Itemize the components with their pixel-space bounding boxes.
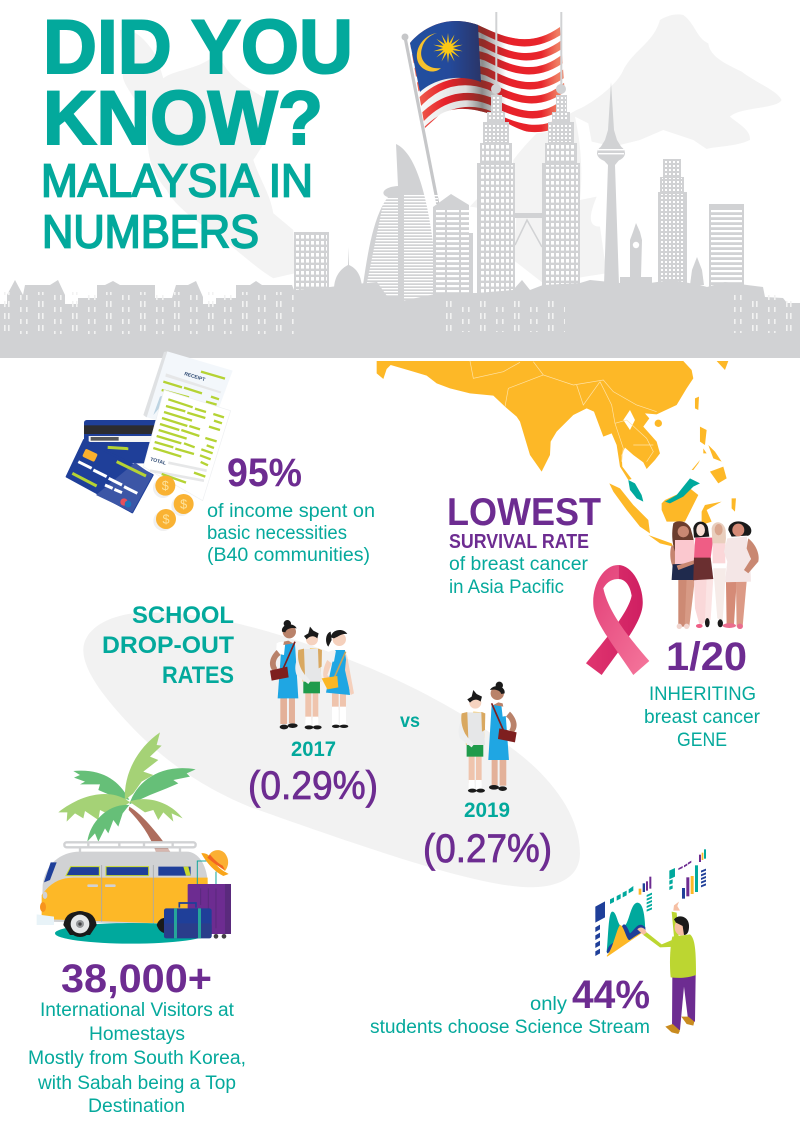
- Malaysia highlighted: [628, 478, 700, 503]
- students 2017: [270, 620, 354, 729]
- school drop-out heading: [102, 602, 234, 689]
- lowest survival rate text: SURVIVAL RATE: [449, 531, 589, 553]
- map of Asia: [377, 361, 736, 547]
- 95% statistic: [207, 451, 375, 566]
- ground shadow: [55, 923, 208, 944]
- 95% statistic: of income spent on: [207, 501, 375, 522]
- school drop-out heading: DROP-OUT: [102, 632, 234, 659]
- background ghost map of Borneo: [470, 14, 782, 283]
- front receipt: TOTAL: [149, 457, 167, 467]
- wheels: [63, 911, 167, 937]
- front credit card: [67, 440, 153, 512]
- title block: KNOW?: [43, 76, 323, 161]
- vs label: vs: [400, 711, 420, 732]
- skybridge: [515, 213, 543, 247]
- 2019 figure: [423, 799, 552, 871]
- card and receipts illustration: [67, 351, 233, 531]
- 1/20 statistic: [644, 635, 761, 751]
- 38,000+ statistic: Homestays: [89, 1024, 185, 1045]
- luggage: [164, 861, 231, 939]
- title block: NUMBERS: [42, 206, 259, 258]
- lowest survival rate text: LOWEST: [447, 491, 601, 534]
- mainland asia and India: [377, 361, 693, 480]
- block beside sail: [433, 194, 473, 300]
- 44% statistic: 44%: [572, 973, 650, 1017]
- Laos highlight and borders: [470, 361, 657, 462]
- campervan with palm tree: [37, 732, 231, 944]
- 38,000+ statistic: 38,000+: [61, 957, 212, 1001]
- 38,000+ statistic: [28, 957, 246, 1117]
- right chart: [669, 849, 706, 899]
- title block: [41, 5, 353, 258]
- 1/20 statistic: GENE: [677, 730, 727, 751]
- 95% statistic: (B40 communities): [207, 545, 370, 566]
- coins: [153, 476, 194, 531]
- background ghost map of Peninsular Malaysia: [120, 29, 295, 278]
- 38,000+ statistic: with Sabah being a Top: [37, 1073, 236, 1094]
- pink ribbon: [586, 565, 649, 675]
- woman 3: [712, 522, 726, 627]
- 44% statistic: students choose Science Stream: [370, 1017, 650, 1038]
- sail tower: [363, 144, 438, 303]
- 95% statistic: basic necessities: [207, 523, 347, 544]
- southeast asian islands: [609, 361, 736, 547]
- coins: $: [162, 513, 170, 527]
- students 2019: [459, 682, 517, 793]
- van body: [37, 852, 208, 925]
- skyline silhouette: [0, 12, 800, 358]
- man figure: [637, 902, 696, 1034]
- coins: $: [180, 498, 187, 512]
- right twin tower: [542, 12, 580, 300]
- 2019 figure: 2019: [464, 799, 510, 822]
- KL tower: [597, 82, 625, 285]
- women group: [670, 521, 759, 629]
- city base: [0, 280, 800, 358]
- 38,000+ statistic: Destination: [88, 1096, 185, 1117]
- lowest survival rate text: [447, 491, 601, 598]
- man with data charts: [595, 849, 706, 1034]
- lowest survival rate text: in Asia Pacific: [449, 577, 564, 598]
- left building: [294, 232, 329, 327]
- left chart: [595, 877, 652, 957]
- title block: MALAYSIA IN: [41, 154, 313, 206]
- 44% statistic: only: [530, 994, 568, 1015]
- roof rack: [64, 842, 196, 852]
- coins: $: [162, 479, 169, 493]
- sun hat: [201, 850, 229, 876]
- 1/20 statistic: INHERITING: [649, 684, 756, 705]
- striped building: [709, 204, 744, 289]
- 2019 figure: (0.27%): [423, 827, 552, 871]
- front receipt: [143, 390, 231, 501]
- grey ellipse panel: school drop-out: [83, 612, 580, 887]
- back credit card: [84, 420, 159, 463]
- mosque dome: [334, 247, 362, 290]
- girl with ponytail: [322, 630, 354, 728]
- lowest survival rate text: of breast cancer: [449, 554, 589, 575]
- 38,000+ statistic: International Visitors at: [40, 1000, 235, 1021]
- 1/20 statistic: breast cancer: [644, 707, 761, 728]
- 2017 figure: [248, 738, 378, 808]
- Malaysian flag on pole: [402, 21, 564, 204]
- left twin tower: [477, 12, 515, 300]
- 2017 figure: (0.29%): [248, 764, 378, 808]
- 38,000+ statistic: Mostly from South Korea,: [28, 1048, 246, 1069]
- small minaret: [690, 257, 704, 285]
- woman 1: [670, 521, 698, 629]
- palm tree: [58, 732, 196, 852]
- woman 4: [723, 521, 759, 629]
- 44% statistic: [370, 973, 650, 1038]
- school drop-out heading: RATES: [162, 662, 234, 689]
- back receipt: RECEIPT: [183, 371, 206, 383]
- title block: DID YOU: [43, 5, 353, 90]
- 95% statistic: 95%: [227, 451, 302, 495]
- office tower: [658, 159, 687, 285]
- woman 2: [693, 522, 713, 628]
- back receipt: [143, 351, 233, 437]
- 2017 figure: 2017: [291, 738, 336, 761]
- school drop-out heading: SCHOOL: [132, 602, 234, 629]
- 1/20 statistic: 1/20: [666, 635, 747, 679]
- clock tower: [620, 223, 652, 287]
